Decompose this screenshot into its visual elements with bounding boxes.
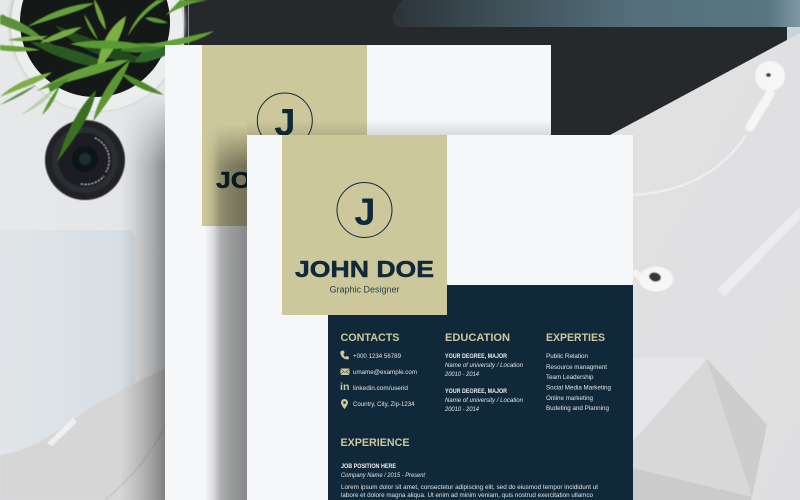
experience section: Company Name / 2015 - Present xyxy=(341,472,425,479)
white pencil xyxy=(717,207,800,296)
education section: Name of university / Location xyxy=(445,362,524,369)
contacts section: umame@example.com xyxy=(353,369,417,376)
tan header block xyxy=(282,135,447,315)
experties section: Social Media Marketing xyxy=(546,384,611,392)
back page tan header block xyxy=(202,45,367,226)
experties section xyxy=(546,332,611,412)
education section: YOUR DEGREE, MAJOR xyxy=(445,354,508,360)
education section: YOUR DEGREE, MAJOR xyxy=(445,389,508,395)
stitch line xyxy=(188,0,190,45)
icon: envelope xyxy=(340,368,350,375)
contacts section xyxy=(340,332,417,409)
education section: EDUCATION xyxy=(445,332,510,344)
monogram circle: J xyxy=(354,192,376,234)
experience section xyxy=(340,437,598,499)
plant pot xyxy=(9,0,185,111)
name: JOHN DOE xyxy=(295,256,434,282)
white paper on right xyxy=(560,33,800,500)
curved paper sheet xyxy=(0,366,170,500)
experience section: Lorem ipsum dolor sit amet, consectetur adipiscing elit, sed do eiusmod tempor incididunt ut xyxy=(341,484,598,491)
back resume page xyxy=(165,45,551,500)
icon: linkedin: in xyxy=(340,381,350,393)
education section: 20010 - 2014 xyxy=(444,371,480,378)
paper pyramid xyxy=(633,358,767,500)
education section: 20010 - 2014 xyxy=(444,406,480,413)
contacts section: CONTACTS xyxy=(340,332,400,344)
dark desk mat xyxy=(184,0,787,140)
contacts section: linkedin.com/userid xyxy=(353,385,408,392)
education section xyxy=(444,332,524,413)
experties section: Team Leadership xyxy=(546,374,594,381)
back page name: JOHN DOE xyxy=(216,167,355,193)
experties section: Budeting and Planning xyxy=(546,405,609,412)
plant leaves xyxy=(0,0,214,162)
experience section: JOB POSITION HERE xyxy=(341,464,396,470)
shadow of back page on desk xyxy=(126,101,165,500)
experties section: Online marketing xyxy=(546,395,593,402)
front resume page xyxy=(247,135,633,500)
pale corner xyxy=(787,27,800,41)
icon: phone xyxy=(340,350,349,359)
experties section: EXPERTIES xyxy=(546,332,606,344)
experties section: Public Relation xyxy=(546,353,588,360)
laptop on desk xyxy=(0,230,135,500)
experience section: labore et dolore magna aliqua. Ut enim ad minim veniam, quis nostrud exercitation ullamco xyxy=(341,492,593,499)
experties section: Resource managment xyxy=(546,364,607,371)
back page monogram circle: J xyxy=(274,102,296,144)
icon: map pin xyxy=(341,399,348,409)
earphone bottom xyxy=(633,266,673,292)
camera lens xyxy=(45,120,125,200)
dark content panel xyxy=(328,285,633,500)
education section: Name of university / Location xyxy=(445,397,524,404)
experience section: EXPERIENCE xyxy=(340,437,410,449)
contacts section: +000 1234 56789 xyxy=(353,353,401,360)
back page monogram circle xyxy=(257,93,312,148)
job title: Graphic Designer xyxy=(330,284,400,294)
earphone top with cable xyxy=(633,61,785,195)
monogram circle xyxy=(337,182,392,238)
contacts section: Country, City, Zip-1234 xyxy=(353,401,415,408)
shadow of front page on back page xyxy=(205,120,551,500)
monitor stand xyxy=(392,0,800,27)
